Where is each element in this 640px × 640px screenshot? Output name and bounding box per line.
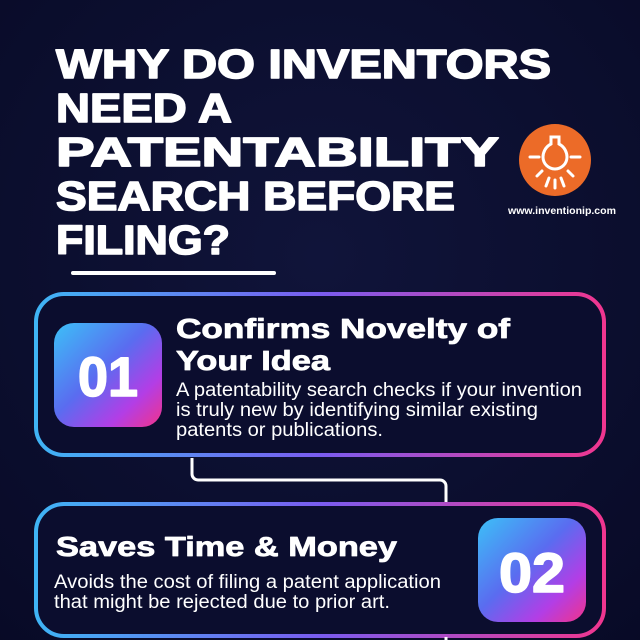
- card 01 body: patents or publications.: [176, 420, 383, 441]
- website url: www.inventionip.com: [507, 206, 616, 217]
- card 01 body: is truly new by identifying similar existing: [176, 400, 538, 421]
- connector to next: [444, 637, 448, 640]
- badge 02: [478, 518, 586, 622]
- title: [56, 41, 551, 263]
- card 02 body: [54, 572, 441, 613]
- panel: card 02: [36, 504, 604, 636]
- card 02 body: Avoids the cost of filing a patent application: [54, 572, 441, 593]
- panel: card 01: [36, 294, 604, 455]
- badge 01: [54, 323, 162, 427]
- logo: lightbulb circle: [519, 124, 591, 196]
- title: WHY DO INVENTORS: [56, 41, 551, 87]
- card 01 heading: [176, 313, 511, 376]
- card 01 body: A patentability search checks if your invention: [176, 380, 582, 401]
- card 01 heading: Your Idea: [176, 345, 331, 376]
- badge 01: 01: [78, 345, 138, 408]
- card 01 heading: Confirms Novelty of: [176, 313, 511, 344]
- title: NEED A: [56, 85, 232, 131]
- card 02 body: that might be rejected due to prior art.: [54, 592, 390, 613]
- card 02 heading: Saves Time & Money: [56, 531, 398, 562]
- title: PATENTABILITY: [56, 129, 499, 175]
- card 01 body: [176, 380, 582, 441]
- connector arrow 1-2: [192, 458, 446, 502]
- badge 02: 02: [499, 541, 565, 604]
- title: SEARCH BEFORE: [56, 173, 455, 219]
- title: FILING?: [56, 217, 230, 263]
- title underline: [71, 271, 276, 275]
